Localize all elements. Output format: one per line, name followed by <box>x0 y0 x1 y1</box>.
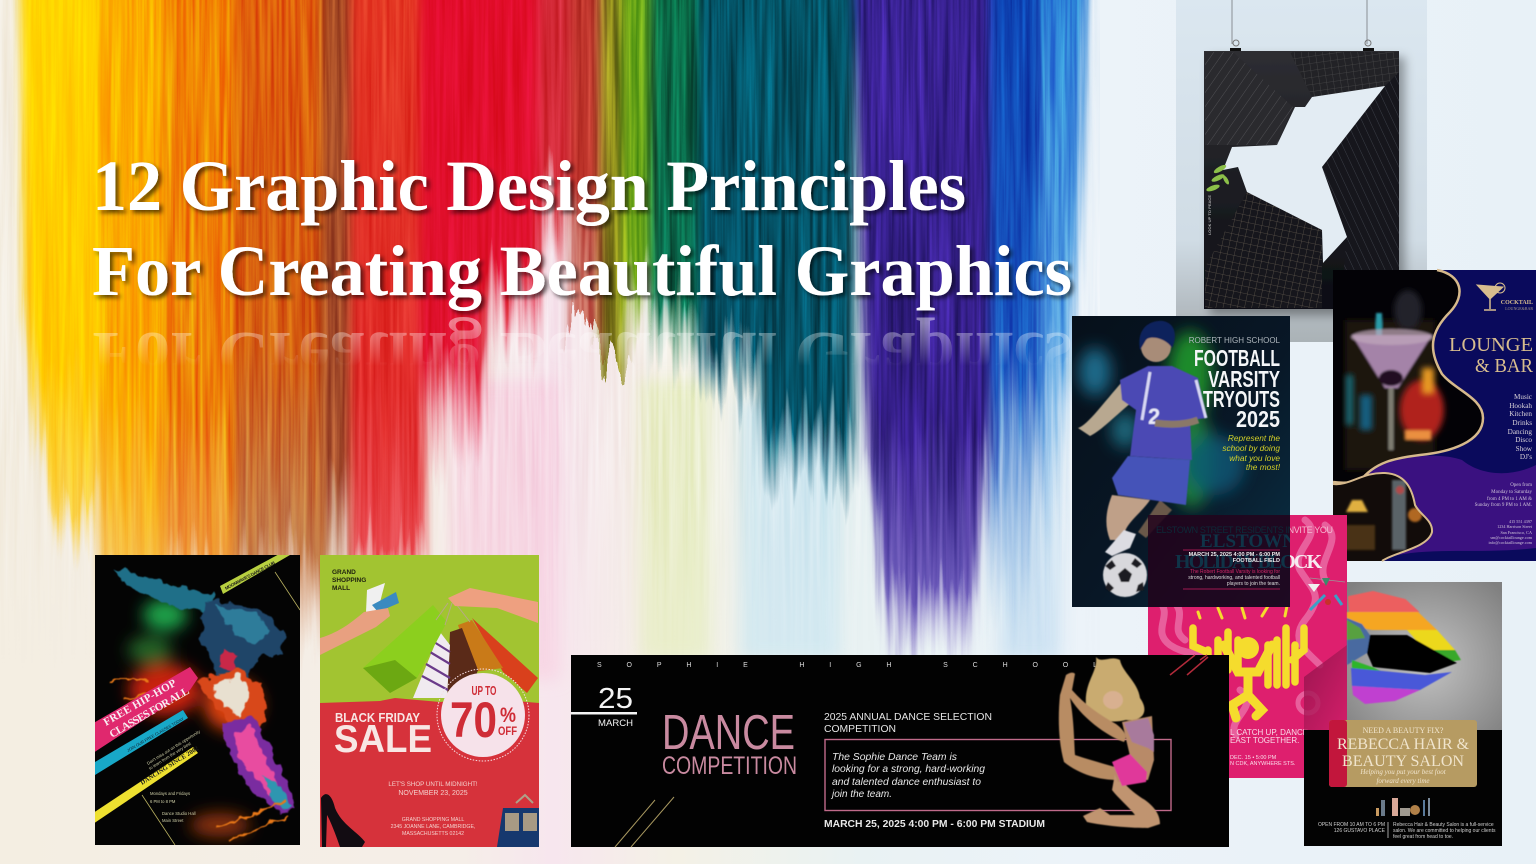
pink footer text: N CDK, ANYWHERE STS. <box>1230 761 1296 767</box>
poster: football varsity tryouts <box>1067 316 1290 607</box>
photo: football player: 2 <box>1148 404 1160 429</box>
gold name plate: BEAUTY SALON <box>1342 753 1464 770</box>
player glow <box>1079 331 1245 508</box>
description box: The Sophie Dance Team is <box>832 751 958 763</box>
cocktail text: Hookah <box>1509 402 1532 410</box>
sale details: GRAND SHOPPING MALL <box>402 817 464 823</box>
photo: bar interior <box>1333 473 1438 563</box>
gold name plate: Helping you put your best foot <box>1359 768 1447 776</box>
cocktail text: Sunday from 9 PM to 1 AM. <box>1475 503 1532 508</box>
badge: up to 70% off: % <box>500 704 516 727</box>
translucent overlap of pink poster: ELSTOWN STREET RESIDENTS INVITE YOU <box>1156 525 1333 535</box>
dance heading: COMPETITION <box>662 752 797 780</box>
mall name: MALL <box>332 585 350 592</box>
blue band <box>90 710 188 778</box>
gold name plate: NEED A BEAUTY FIX? <box>1363 726 1444 735</box>
football headline: school by doing <box>1222 443 1280 453</box>
icon: yellow dancing crowd <box>1193 606 1304 718</box>
blue band: JOIN OUR FREE CLASSES TODAY <box>126 716 185 753</box>
translucent overlap of pink poster: The Robert Football Varsity is looking for <box>1190 569 1280 575</box>
badge: up to 70% off: 70 <box>450 692 497 748</box>
football headline: TRYOUTS <box>1203 386 1280 412</box>
translucent overlap of pink poster: FOOTBALL FIELD <box>1233 558 1280 564</box>
sale headline: SALE <box>334 718 432 761</box>
icon: handbag <box>497 795 539 847</box>
background: painted canvas <box>0 0 1100 864</box>
cocktail text: Drinks <box>1512 419 1532 427</box>
title: For Creating Beautiful Graphics <box>92 231 1072 311</box>
poster: white dove on skyscrapers <box>1204 51 1399 309</box>
cocktail text <box>1449 300 1534 545</box>
cocktail text: Monday to Saturday <box>1491 490 1532 495</box>
wall panel with hanging poster <box>1176 0 1427 342</box>
icon: soccer ball <box>1103 553 1147 597</box>
small body copy: to learn from the very best <box>148 740 192 771</box>
sale details <box>388 781 478 837</box>
small body copy: Mondays and Fridays <box>150 791 190 796</box>
description box: and talented dance enthusiast to <box>832 776 981 788</box>
cocktail text: Dancing <box>1508 428 1532 436</box>
sale details: 2345 JOANNE LANE, CAMBRIDGE, <box>391 824 475 830</box>
pink footer text: EAST TOGETHER. <box>1230 736 1299 745</box>
photo: dancer <box>110 566 294 840</box>
cocktail text: 1234 Harrison Street <box>1497 524 1533 529</box>
dance heading: DANCE <box>662 706 795 760</box>
paint brush strokes <box>18 0 1092 680</box>
icon: white dove <box>1223 86 1385 263</box>
description box: join the team. <box>830 788 892 800</box>
football headline: the most! <box>1246 462 1281 472</box>
translucent overlap of pink poster: MARCH 25, 2025 4:00 PM - 6:00 PM <box>1189 552 1280 558</box>
translucent overlap of pink poster: ELSTOWN <box>1200 531 1296 552</box>
cocktail text: & BAR <box>1475 355 1534 377</box>
mall name <box>332 570 366 590</box>
salon info text: Rebecca Hair & Beauty Salon is a full-service <box>1393 822 1494 828</box>
icon: party bunting and glasses <box>1308 578 1345 610</box>
cocktail text: 415 551 4397 <box>1509 519 1532 524</box>
pink headline band <box>90 667 198 755</box>
pink footer text <box>1230 728 1310 767</box>
icon: beauty products <box>1376 798 1430 816</box>
small body copy: Main Street <box>162 818 184 823</box>
small body copy: 6 PM to 8 PM <box>150 799 176 804</box>
poster: free hip-hop classes <box>90 552 300 845</box>
event subtitle: 2025 ANNUAL DANCE SELECTION <box>824 711 992 723</box>
small body copy: Don't miss out on this opportunity <box>146 728 202 766</box>
icon: shopping bags <box>363 588 538 700</box>
decorative wavy bands <box>1158 520 1332 735</box>
pink headline band: CLASSES FOR ALL <box>108 685 191 741</box>
photo: football player <box>1078 321 1207 597</box>
badge: up to 70% off: OFF <box>498 724 517 738</box>
gold name plate: REBECCA HAIR & <box>1337 736 1469 753</box>
translucent overlap of pink poster: HOLIDAY BLOCK <box>1175 551 1322 573</box>
translucent overlap of pink poster <box>1148 515 1290 607</box>
sale details: NOVEMBER 23, 2025 <box>398 790 468 797</box>
description box: looking for a strong, hard-working <box>832 763 985 775</box>
poster: pink holiday block party <box>1148 515 1347 778</box>
salon info text: feel great from head to toe. <box>1393 834 1453 840</box>
date <box>571 683 637 729</box>
cocktail text: Show <box>1516 445 1533 453</box>
top club tag <box>220 552 290 594</box>
icon: rainbow lips <box>1347 592 1461 704</box>
colour glows <box>128 599 260 837</box>
overlap shading on pink <box>1304 645 1347 730</box>
icon: hand with credit card <box>320 583 399 655</box>
photo: leaping dancer <box>1059 657 1160 828</box>
football headline: 2025 <box>1236 406 1280 432</box>
badge: up to 70% off: UP TO <box>472 683 496 698</box>
cocktail text: DJ's <box>1520 453 1532 461</box>
event subtitle: COMPETITION <box>824 723 896 735</box>
poster: cocktail lounge and bar <box>1333 270 1536 563</box>
spaced school name: SOPHIE HIGH SCHOOL <box>597 662 1097 669</box>
banner: sophie high school dance competition <box>571 655 1229 847</box>
cocktail text: Kitchen <box>1509 410 1532 418</box>
badge: up to 70% off <box>437 669 529 761</box>
sale details: LET'S SHOP UNTIL MIDNIGHT! <box>388 781 478 788</box>
small body copy: Dance Studio Hall <box>162 811 196 816</box>
translucent overlap of pink poster: strong, hardworking, and talented football <box>1188 575 1280 581</box>
photo: martini glass <box>1333 270 1482 482</box>
mall name: SHOPPING <box>332 577 366 584</box>
football headline: what you love <box>1229 453 1280 463</box>
salon info text: 126 GUSTAVO PLACE <box>1334 828 1386 834</box>
football headline: VARSITY <box>1208 366 1280 392</box>
sale headline <box>335 713 431 752</box>
translucent overlap of pink poster: players to join the team. <box>1227 581 1280 587</box>
yellow band: DANCING SINCE 2002 <box>139 745 200 787</box>
poster: pink holiday block party: HOLIDAY BLOCK <box>1175 551 1322 573</box>
decorative gold slashes <box>615 797 674 847</box>
poster: rebecca hair and beauty salon <box>1304 582 1502 846</box>
cocktail text: from 4 PM to 1 AM & <box>1487 497 1532 502</box>
poster: black friday sale <box>320 555 539 847</box>
icon: martini glass <box>1477 283 1505 310</box>
poster vertical caption: LOOK UP TO PEACE <box>1207 195 1212 235</box>
gold name plate <box>1329 720 1477 787</box>
sale details: MASSACHUSETTS 02142 <box>402 831 464 837</box>
icon: olive branch <box>1206 163 1230 193</box>
cocktail text: info@cocktaillounge.com <box>1488 540 1533 545</box>
salon info text: OPEN FROM 10 AM TO 6 PM <box>1318 822 1385 828</box>
mall name: GRAND <box>332 569 356 576</box>
cocktail text: San Francisco, CA <box>1500 530 1532 536</box>
cocktail text: Open from <box>1510 483 1532 488</box>
top club tag: MOONWAVE'S DANCE CLUB <box>224 560 277 591</box>
sale headline: BLACK FRIDAY <box>335 710 420 725</box>
cocktail text: Music <box>1514 393 1532 401</box>
title reflection: For Creating Beautiful Graphics <box>92 317 1072 397</box>
salon info text: salon. We are committed to helping our clients <box>1393 828 1496 834</box>
pink headline: ELSTOWN STREET RESIDENTS INVITE YOU <box>1156 525 1333 535</box>
date: 25 <box>598 683 633 715</box>
football headline <box>1189 336 1281 472</box>
icon: high heel shoe <box>321 794 365 847</box>
cocktail text: sm@cocktaillounge.com <box>1490 535 1533 540</box>
cocktail text: Disco <box>1515 436 1532 444</box>
small body copy <box>146 728 202 823</box>
pink footer text: L CATCH UP, DANCE, <box>1230 728 1310 737</box>
football headline: FOOTBALL <box>1194 345 1280 371</box>
title: 12 Graphic Design Principles <box>92 146 966 226</box>
football headline: Represent the <box>1228 433 1280 443</box>
decorative red slashes <box>1170 655 1208 675</box>
pink footer text: DEC. 15 • 5:00 PM <box>1230 755 1277 761</box>
cocktail text: COCKTAIL <box>1501 300 1533 306</box>
cocktail text: LOUNGE <box>1449 334 1533 356</box>
yellow band <box>95 746 198 823</box>
date and venue: MARCH 25, 2025 4:00 PM - 6:00 PM STADIUM <box>824 818 1045 830</box>
gold name plate: forward every time <box>1376 777 1430 785</box>
dance heading <box>662 706 797 780</box>
football headline: ROBERT HIGH SCHOOL <box>1189 336 1281 345</box>
description box <box>825 740 1171 810</box>
event subtitle <box>824 711 992 735</box>
pink headline band: FREE HIP-HOP <box>102 677 179 729</box>
cocktail text: LOUNGE&BAR <box>1505 306 1533 311</box>
date: MARCH <box>598 718 633 729</box>
salon info text <box>1318 822 1496 840</box>
title <box>92 146 1072 311</box>
